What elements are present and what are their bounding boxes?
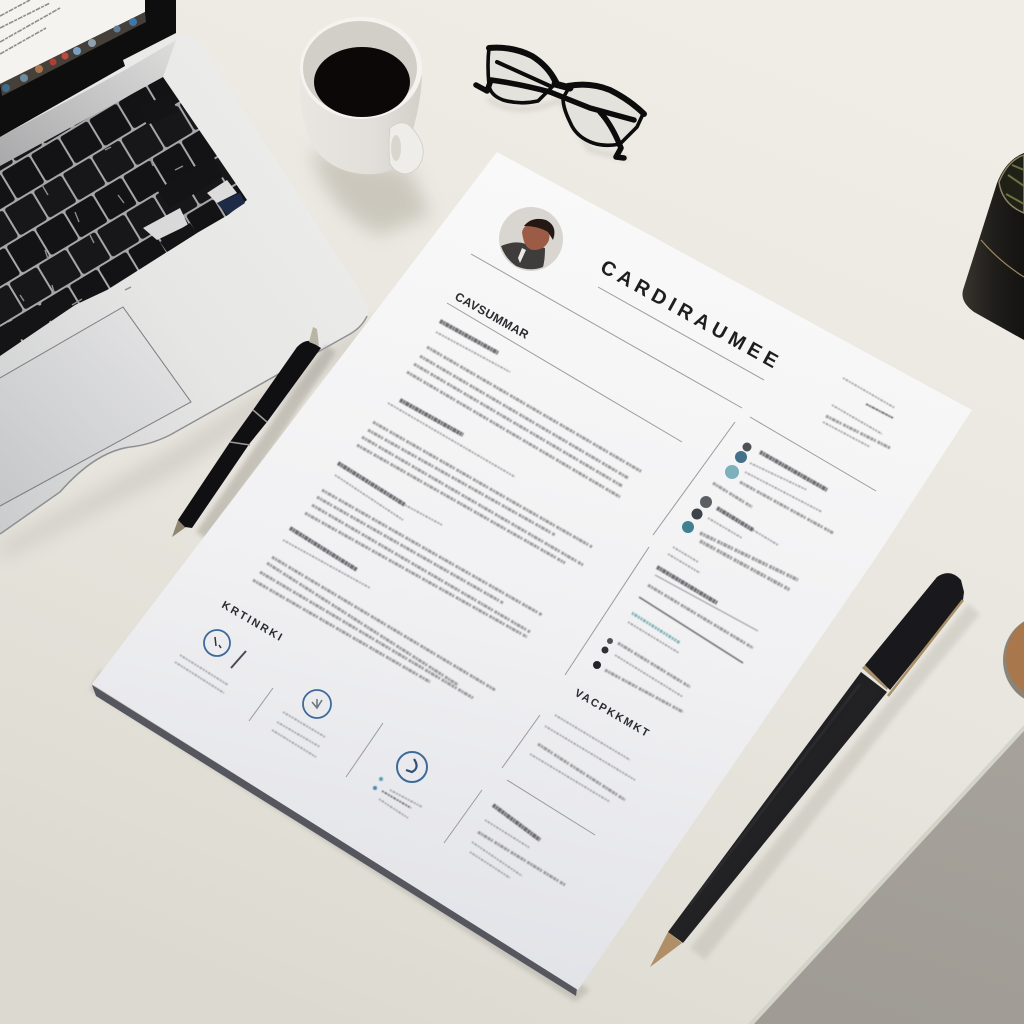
caption one xyxy=(175,655,228,693)
cup handle xyxy=(389,123,423,174)
name heading: CARDIRAUMEE xyxy=(597,256,781,373)
dock xyxy=(0,12,146,96)
cup body xyxy=(300,76,422,174)
wooden coaster xyxy=(1003,614,1024,705)
temple two xyxy=(600,112,624,158)
portrait xyxy=(499,207,563,271)
sidebar text xyxy=(605,452,833,712)
right lens xyxy=(563,86,643,145)
caption three xyxy=(373,777,422,818)
separator xyxy=(346,723,383,777)
icon: circle one xyxy=(204,630,246,668)
screen xyxy=(0,0,145,84)
lower sidebar text xyxy=(470,715,635,885)
icon: circle two xyxy=(303,690,331,718)
section heading: summary: CAVSUMMAR xyxy=(453,289,531,342)
contact text top right xyxy=(823,378,895,448)
plant pot xyxy=(962,153,1024,340)
glasses shadow xyxy=(490,100,625,158)
document xyxy=(90,152,972,1002)
table edge lower right xyxy=(748,725,1024,1024)
separator xyxy=(444,790,482,843)
coffee xyxy=(314,47,410,117)
keyboard xyxy=(0,77,247,356)
separator xyxy=(249,688,273,721)
laptop xyxy=(0,0,385,560)
document sheet xyxy=(92,152,972,990)
laptop shadow xyxy=(0,320,385,560)
cup shadow xyxy=(310,150,430,235)
trackpad xyxy=(0,307,191,506)
coffee cup xyxy=(300,17,430,235)
header rules xyxy=(447,254,876,491)
large pen xyxy=(650,573,980,967)
large keys xyxy=(0,93,223,353)
icon: circle three xyxy=(397,752,427,782)
screen text xyxy=(0,0,60,54)
left lens xyxy=(488,48,555,103)
skills heading: KRTINRKI xyxy=(220,599,284,644)
glasses xyxy=(476,48,644,158)
sidebar dividers xyxy=(502,422,735,835)
key legends xyxy=(20,147,183,305)
hinge shade xyxy=(0,40,176,166)
cup rim xyxy=(300,17,422,119)
document shadow xyxy=(90,670,590,1002)
light key patches xyxy=(143,208,188,240)
laptop base xyxy=(0,33,368,534)
sidebar icons xyxy=(593,442,752,669)
experience text block xyxy=(253,321,642,698)
small pen xyxy=(172,327,336,540)
document thickness xyxy=(92,685,577,996)
bridge xyxy=(555,84,570,88)
top bars xyxy=(489,48,556,82)
temple one xyxy=(476,80,634,120)
section heading: experience sidebar: VACPKKMKT xyxy=(573,687,651,740)
screen bezel xyxy=(0,0,176,137)
caption two xyxy=(272,712,325,757)
